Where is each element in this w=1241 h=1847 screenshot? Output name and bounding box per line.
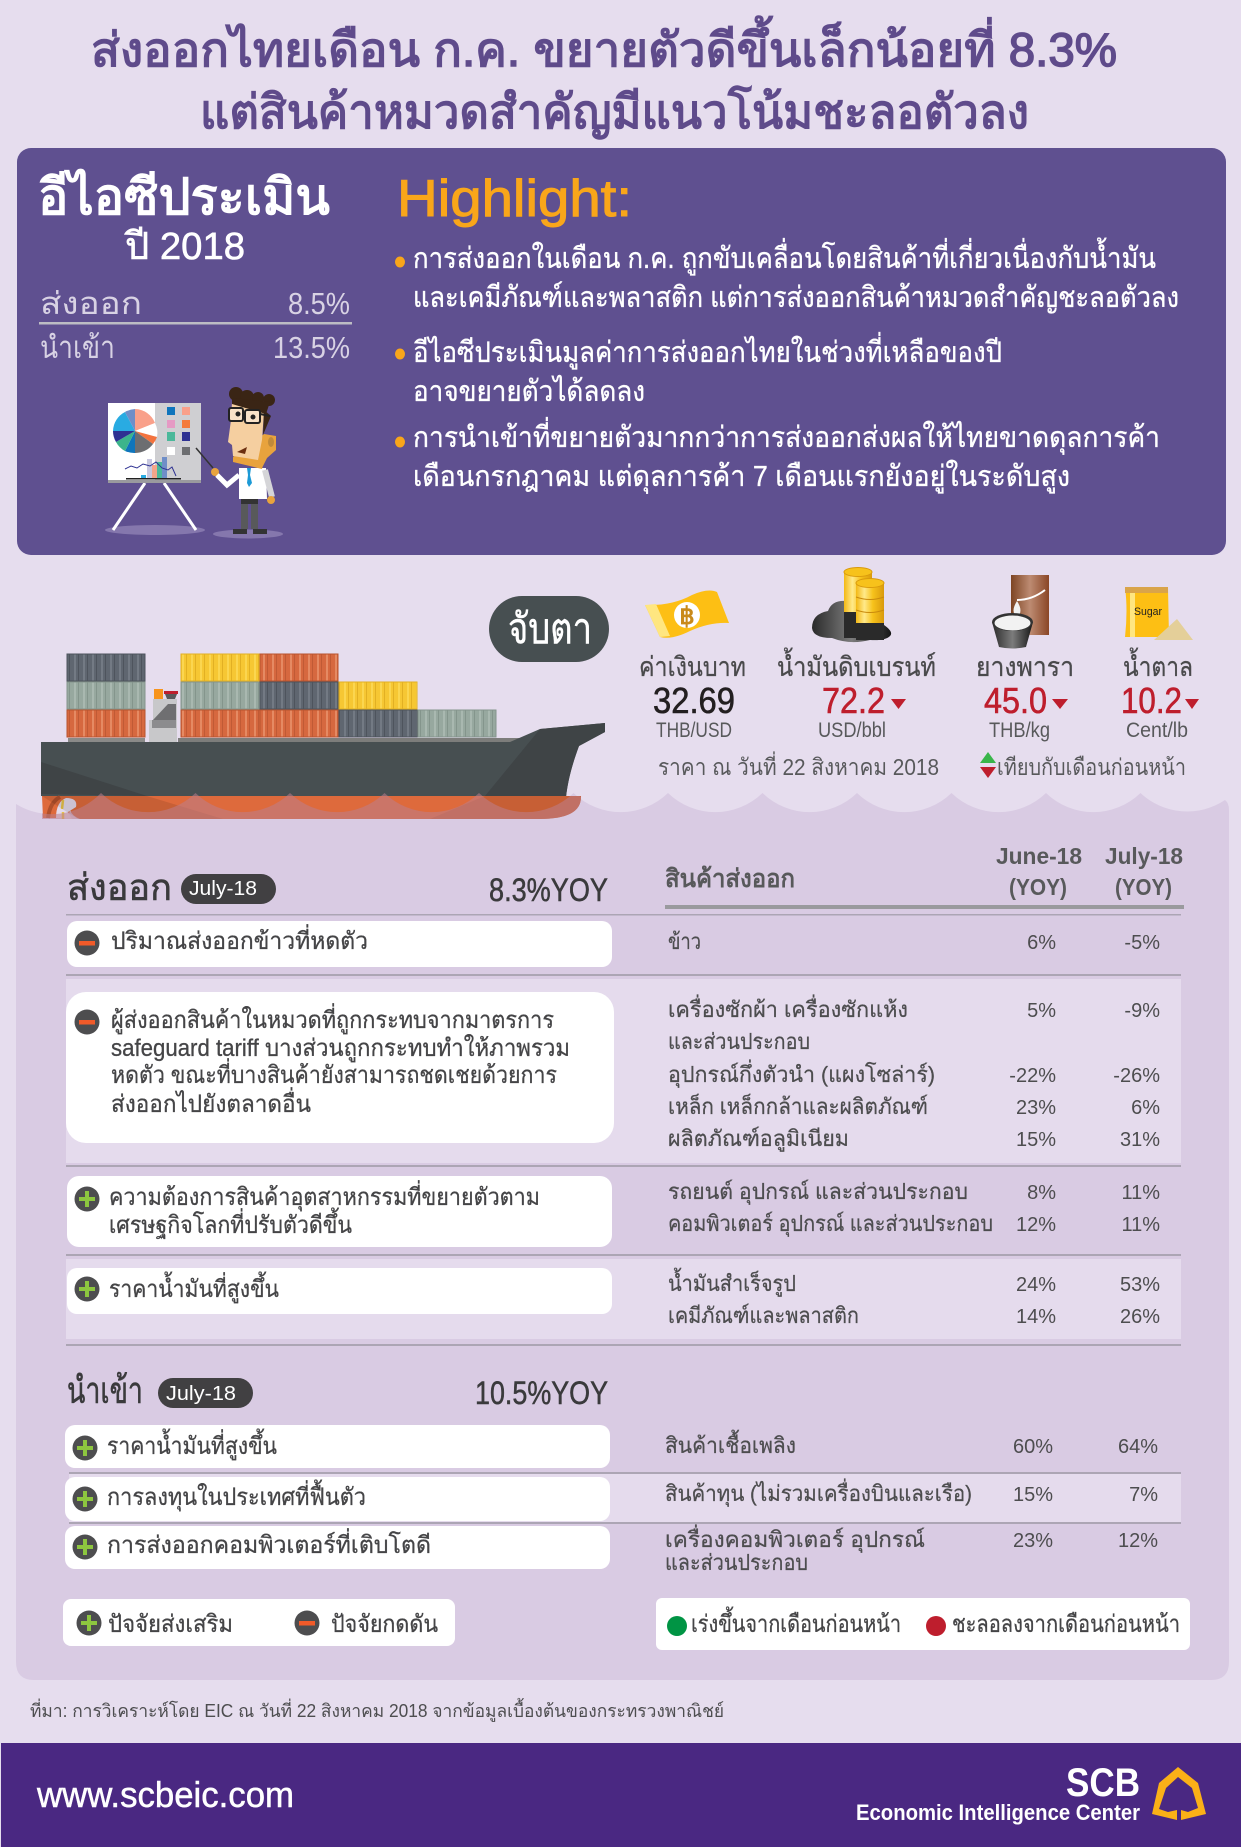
- table: export products: 12%: [1016, 1214, 1056, 1236]
- section: exports header: ส่งออก: [67, 867, 172, 908]
- table: import products: สินค้าทุน (ไม่รวมเครื่องบินและเรือ): [665, 1478, 972, 1507]
- import factor: computer exports: [65, 1526, 610, 1569]
- table: import products: [665, 1430, 1158, 1575]
- icon: baht flag: ฿: [679, 603, 695, 630]
- import factor: oil price: ราคาน้ำมันที่สูงขึ้น: [107, 1428, 277, 1461]
- legend: factors: ปัจจัยกดดัน: [331, 1611, 438, 1638]
- factor: oil price: [67, 1268, 612, 1314]
- table: export products: คอมพิวเตอร์ อุปกรณ์ และส่วนประกอบ: [668, 1211, 993, 1237]
- factor: oil price: ราคาน้ำมันที่สูงขึ้น: [109, 1271, 279, 1304]
- table header: July-18: [1105, 843, 1183, 869]
- section: exports header: 8.3%YOY: [489, 872, 608, 908]
- table: import products: 64%: [1118, 1436, 1158, 1458]
- commodity labels: ยางพารา: [976, 652, 1074, 682]
- panel: highlight: [17, 148, 1226, 555]
- factor: industrial demand: [67, 1176, 612, 1247]
- table: export products: และส่วนประกอบ: [668, 1029, 810, 1054]
- commodity units: [656, 719, 1188, 742]
- table: import products: และส่วนประกอบ: [665, 1550, 808, 1575]
- legend: month trend: [656, 1598, 1190, 1650]
- factor: industrial demand: ความต้องการสินค้าอุตสาหกรรมที่ขยายตัวตาม: [109, 1180, 540, 1212]
- SCB wordmark: SCB: [1066, 1761, 1140, 1805]
- icon: sugar bag: Sugar: [1134, 606, 1162, 618]
- commodity units: Cent/lb: [1126, 719, 1188, 742]
- factor: industrial demand: เศรษฐกิจโลกที่ปรับตัวดีขึ้น: [109, 1207, 352, 1239]
- factor: safeguard tariff: [66, 992, 614, 1143]
- table: export products: เคมีภัณฑ์และพลาสติก: [668, 1303, 859, 1328]
- table: export products: 31%: [1120, 1129, 1160, 1151]
- row divider lines: [66, 914, 1181, 1524]
- table: export products: น้ำมันสำเร็จรูป: [668, 1268, 796, 1297]
- commodity labels: น้ำมันดิบเบรนท์: [777, 647, 936, 682]
- EIC forecast heading: อีไอซีประเมิน: [38, 168, 330, 225]
- table: export products: เครื่องซักผ้า เครื่องซักแห้ง: [668, 994, 908, 1022]
- table: export products: 15%: [1016, 1129, 1056, 1151]
- table: export products: ข้าว: [668, 929, 701, 954]
- table: export products: -5%: [1124, 932, 1160, 954]
- table: export products: 8%: [1027, 1182, 1056, 1204]
- icon: SCB logo: [1152, 1767, 1206, 1820]
- table: export products: รถยนต์ อุปกรณ์ และส่วนประกอบ: [668, 1179, 968, 1205]
- alternating row backgrounds: [66, 979, 1181, 1523]
- title: [91, 16, 1117, 139]
- factor: rice volume: ปริมาณส่งออกข้าวที่หดตัว: [111, 924, 368, 955]
- table: export products: 5%: [1027, 1000, 1056, 1022]
- commodity labels: [639, 647, 1193, 682]
- highlight bullets: [395, 237, 1179, 494]
- section: imports header: นำเข้า: [67, 1370, 143, 1411]
- commodity labels: ค่าเงินบาท: [639, 652, 746, 682]
- commodity units: USD/bbl: [818, 719, 886, 742]
- table: export products: [668, 929, 1160, 1328]
- table: import products: สินค้าเชื้อเพลิง: [665, 1430, 796, 1458]
- waterline overlay: [42, 793, 581, 819]
- table: import products: 60%: [1013, 1436, 1053, 1458]
- factor: safeguard tariff: หดตัว ขณะที่บางสินค้ายังสามารถชดเชยด้วยการ: [111, 1058, 557, 1089]
- table header: June-18: [996, 843, 1082, 869]
- highlight bullets: อีไอซีประเมินมูลค่าการส่งออกไทยในช่วงที่เหลือของปี: [413, 332, 1002, 370]
- factor: safeguard tariff: ผู้ส่งออกสินค้าในหมวดที่ถูกกระทบจากมาตรการ: [111, 1003, 554, 1035]
- factor: safeguard tariff: safeguard tariff บางส่วนถูกกระทบทำให้ภาพรวม: [111, 1034, 570, 1063]
- icon: oil barrels: [812, 568, 891, 642]
- badge: watch: จับตา: [508, 605, 592, 652]
- table header: สินค้าส่งออก: [665, 865, 795, 893]
- highlight bullets: การนำเข้าที่ขยายตัวมากกว่าการส่งออกส่งผลให้ไทยขาดดุลการค้า: [413, 417, 1160, 455]
- SCB wordmark: [856, 1761, 1140, 1825]
- EIC forecast figures: ส่งออก: [40, 286, 142, 321]
- highlight bullets: เดือนกรกฎาคม แต่ดุลการค้า 7 เดือนแรกยังอยู่ในระดับสูง: [413, 459, 1070, 494]
- EIC forecast figures: 13.5%: [273, 330, 350, 365]
- EIC forecast heading: ปี 2018: [124, 226, 245, 268]
- import factor: domestic investment: [65, 1477, 610, 1521]
- commodity units: THB/USD: [656, 719, 732, 742]
- commodity labels: น้ำตาล: [1123, 647, 1193, 682]
- table: export products: ผลิตภัณฑ์อลูมิเนียม: [668, 1126, 849, 1152]
- EIC forecast figures: 8.5%: [288, 286, 350, 321]
- table: export products: 53%: [1120, 1274, 1160, 1296]
- title: ส่งออกไทยเดือน ก.ค. ขยายตัวดีขึ้นเล็กน้อยที่ 8.3%: [91, 16, 1117, 76]
- commodity units: THB/kg: [989, 719, 1050, 742]
- section: exports header: July-18: [189, 878, 257, 900]
- EIC forecast figures: นำเข้า: [40, 330, 115, 365]
- table header: [665, 843, 1184, 909]
- source note: ที่มา: การวิเคราะห์โดย EIC ณ วันที่ 22 สิงหาคม 2018 จากข้อมูลเบื้องต้นของกระทรวงพาณิชย์: [30, 1698, 724, 1722]
- highlight bullets: การส่งออกในเดือน ก.ค. ถูกขับเคลื่อนโดยสินค้าที่เกี่ยวเนื่องกับน้ำมัน: [413, 237, 1156, 276]
- section: imports header: July-18: [166, 1383, 236, 1405]
- panel: trade detail background with waves: [16, 793, 1229, 1680]
- section: imports header: [67, 1370, 608, 1411]
- footer bar: [1, 1743, 1241, 1847]
- highlight bullets: อาจขยายตัวได้ลดลง: [413, 374, 645, 408]
- table: import products: เครื่องคอมพิวเตอร์ อุปกรณ์: [665, 1524, 925, 1553]
- import factor: computer exports: การส่งออกคอมพิวเตอร์ที่เติบโตดี: [107, 1528, 431, 1559]
- SCB wordmark: Economic Intelligence Center: [856, 1800, 1140, 1825]
- table: export products: อุปกรณ์กึ่งตัวนำ (แผงโซล่าร์): [668, 1059, 935, 1088]
- EIC forecast figures: [39, 286, 352, 365]
- table: export products: -26%: [1113, 1065, 1160, 1087]
- table: import products: 15%: [1013, 1484, 1053, 1506]
- icon: analyst character: [196, 387, 283, 538]
- table: export products: 14%: [1016, 1306, 1056, 1328]
- factor: safeguard tariff: ส่งออกไปยังตลาดอื่น: [111, 1087, 311, 1118]
- commodity values: [653, 680, 1199, 721]
- table: export products: -9%: [1124, 1000, 1160, 1022]
- commodity values: 45.0: [984, 680, 1047, 721]
- section: exports header: [67, 867, 608, 908]
- icon: baht flag: [645, 591, 729, 638]
- legend: month trend: เร่งขึ้นจากเดือนก่อนหน้า: [691, 1606, 901, 1638]
- icon: rubber latex: [992, 575, 1049, 648]
- table: export products: 23%: [1016, 1097, 1056, 1119]
- website url: www.scbeic.com: [36, 1774, 294, 1815]
- title: แต่สินค้าหมวดสำคัญมีแนวโน้มชะลอตัวลง: [200, 85, 1029, 139]
- legend: factors: ปัจจัยส่งเสริม: [108, 1611, 233, 1638]
- table: export products: เหล็ก เหล็กกล้าและผลิตภัณฑ์: [668, 1092, 928, 1119]
- commodity values: 32.69: [653, 680, 735, 721]
- commodity values: 72.2: [822, 680, 885, 721]
- table: export products: 11%: [1121, 1182, 1160, 1204]
- table: import products: 7%: [1129, 1484, 1158, 1506]
- month comparison note: เทียบกับเดือนก่อนหน้า: [997, 754, 1186, 780]
- table: export products: -22%: [1009, 1065, 1056, 1087]
- icon: sugar bag: [1125, 587, 1193, 640]
- table: export products: 24%: [1016, 1274, 1056, 1296]
- price date note: ราคา ณ วันที่ 22 สิงหาคม 2018: [658, 751, 939, 780]
- table: import products: 12%: [1118, 1530, 1158, 1552]
- legend: factors: [63, 1599, 455, 1646]
- table: export products: 6%: [1027, 932, 1056, 954]
- EIC forecast heading: [38, 168, 330, 268]
- highlight heading: Highlight:: [397, 170, 632, 228]
- icon: presentation board: [105, 403, 205, 535]
- legend: month trend: ชะลอลงจากเดือนก่อนหน้า: [952, 1611, 1180, 1638]
- section: imports header: 10.5%YOY: [475, 1375, 608, 1411]
- table: export products: 6%: [1131, 1097, 1160, 1119]
- table: export products: 11%: [1121, 1214, 1160, 1236]
- import factor: oil price: [65, 1425, 610, 1468]
- table header: (YOY): [1115, 874, 1172, 900]
- table: import products: 23%: [1013, 1530, 1053, 1552]
- commodity values: 10.2: [1121, 680, 1182, 721]
- badge: watch: [489, 596, 609, 662]
- illustration: container ship: [41, 654, 605, 819]
- table: export products: 26%: [1120, 1306, 1160, 1328]
- table header: (YOY): [1009, 874, 1067, 900]
- factor: rice volume: [67, 921, 612, 967]
- import factor: domestic investment: การลงทุนในประเทศที่ฟื้นตัว: [107, 1479, 366, 1512]
